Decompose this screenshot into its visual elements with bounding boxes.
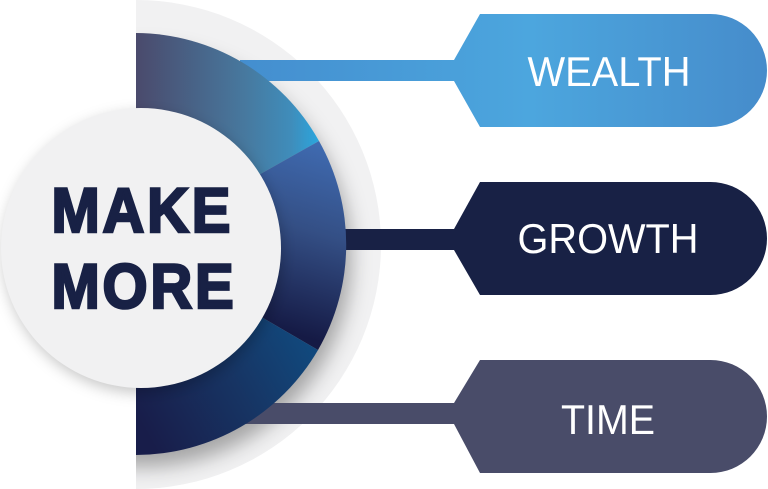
pill: wealth: WEALTH xyxy=(528,48,690,95)
center circle xyxy=(1,108,281,388)
pill: growth xyxy=(454,182,767,295)
center circle shadow xyxy=(3,113,283,393)
segment: top xyxy=(136,33,319,244)
connector: time xyxy=(240,403,460,424)
title: make more xyxy=(52,175,236,322)
pill: wealth xyxy=(454,14,767,127)
ring shadow xyxy=(136,54,363,479)
ring segments xyxy=(136,33,346,455)
connector: wealth xyxy=(240,60,460,81)
segment: middle xyxy=(136,141,346,350)
pale half circle backdrop xyxy=(136,0,381,489)
connector: growth xyxy=(340,229,460,250)
pill: time: TIME xyxy=(561,396,655,443)
title: make more: MAKE xyxy=(52,175,233,246)
pill: time xyxy=(454,360,767,473)
title: make more: MORE xyxy=(52,251,236,322)
segment: bottom xyxy=(136,244,318,455)
pill: growth: GROWTH xyxy=(518,215,698,262)
